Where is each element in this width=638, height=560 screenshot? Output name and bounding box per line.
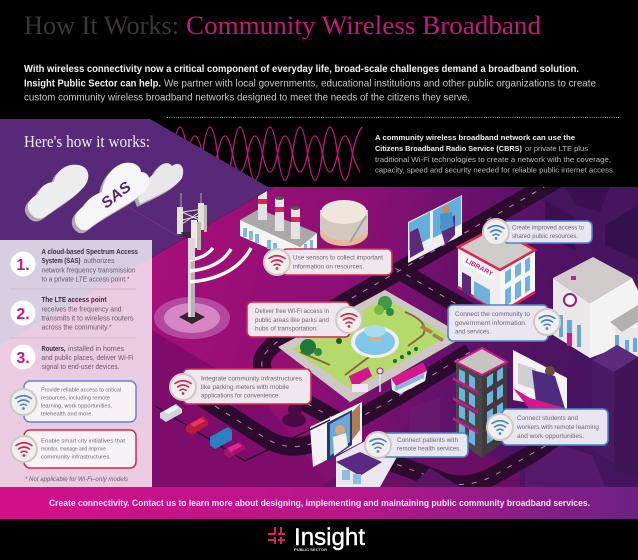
panel: steps bbox=[0, 240, 152, 487]
callout: free wi-fi: Deliver free Wi-Fi access in bbox=[255, 308, 329, 315]
step 2 bbox=[10, 295, 134, 332]
callout: sensors: Use sensors to collect important bbox=[293, 254, 383, 262]
bus shelter bbox=[349, 367, 383, 392]
step 3: and public places, deliver Wi-Fi bbox=[42, 353, 134, 362]
bus bbox=[391, 363, 427, 394]
library: LIBRARY bbox=[464, 258, 494, 278]
CBRS description: Citizens Broadband Radio Service (CBRS) bbox=[375, 144, 523, 153]
factory bbox=[240, 191, 317, 250]
step 2: The LTE access point bbox=[42, 295, 107, 304]
callout: reliable access: resources, including remote bbox=[41, 396, 110, 402]
antenna array bbox=[125, 193, 207, 260]
fountain bbox=[351, 325, 399, 358]
storage tank bbox=[320, 200, 368, 246]
step 1: 1. bbox=[16, 257, 30, 274]
ground bbox=[152, 187, 638, 487]
callout: free wi-fi: hubs of transportation. bbox=[255, 326, 318, 332]
intro text: With wireless connectivity now a critical component of everyday life, broad-scale challenges demand a broadband solution. bbox=[24, 64, 579, 75]
logo: PUBLIC SECTOR bbox=[294, 548, 327, 552]
step 3: signal to end-user devices. bbox=[42, 362, 120, 371]
intro text bbox=[24, 64, 596, 104]
callout: smart city: community infrastructures. bbox=[41, 454, 111, 460]
signal waves bbox=[190, 248, 251, 282]
step 1 bbox=[10, 247, 138, 284]
logo: Insight bbox=[294, 524, 365, 551]
parked cars and truck bbox=[155, 404, 330, 461]
step 1: A cloud-based Spectrum Access bbox=[42, 247, 138, 256]
title: How It Works: bbox=[24, 11, 179, 40]
logo icon bbox=[268, 527, 288, 547]
here's how it works heading: Here's how it works: bbox=[24, 132, 150, 151]
callout: sensors bbox=[264, 249, 392, 275]
callout: reliable access: learning, work opportunities, bbox=[41, 404, 112, 410]
callout: free wi-fi: public areas like parks and bbox=[255, 317, 329, 324]
intro text: Insight Public Sector can help. bbox=[24, 78, 161, 90]
cell tower bbox=[154, 247, 252, 339]
callout: reliable access bbox=[10, 381, 136, 422]
library bbox=[458, 228, 535, 313]
callout: parking: Integrate community infrastructures bbox=[201, 376, 303, 382]
road markings bbox=[214, 187, 546, 485]
step 1: authorizes bbox=[84, 256, 115, 265]
callout: students bbox=[487, 409, 608, 445]
step 2: transmits it to wireless routers bbox=[42, 314, 134, 322]
callout: government: Connect the community to bbox=[455, 311, 530, 318]
callout: free wi-fi bbox=[247, 302, 362, 337]
callout: reliable access: telehealth and more. bbox=[41, 412, 93, 418]
cloud SAS: SAS bbox=[98, 178, 134, 212]
government building bbox=[553, 257, 638, 360]
CBRS description: or private LTE plus bbox=[525, 144, 588, 153]
callout: public resources bbox=[483, 219, 592, 245]
intro text: custom community wireless broadband networks designed to meet the needs of the citizens they serve. bbox=[24, 92, 470, 104]
step 3 bbox=[10, 344, 134, 371]
call to action bar bbox=[0, 487, 638, 519]
step 3: 3. bbox=[16, 350, 30, 367]
callout: patients bbox=[365, 432, 468, 458]
park bbox=[278, 290, 465, 402]
cloud SAS bbox=[72, 163, 149, 233]
CBRS description bbox=[375, 133, 615, 174]
callout: students: and work opportunities. bbox=[517, 433, 584, 440]
callout: sensors: information on resources. bbox=[293, 264, 364, 270]
wave graphic bbox=[172, 127, 362, 180]
callout: government: and services. bbox=[455, 328, 491, 336]
city illustration bbox=[152, 172, 638, 487]
trees bbox=[300, 296, 394, 356]
clinic bbox=[336, 441, 396, 487]
clouds bbox=[25, 163, 183, 233]
dark purple tower bbox=[592, 345, 638, 372]
step 1: network frequency transmission bbox=[42, 266, 136, 274]
apartment tower bbox=[453, 348, 507, 458]
step 3: Routers, bbox=[42, 344, 66, 353]
callout: public resources: Create improved access to bbox=[512, 224, 584, 232]
callout: public resources: shared public resources. bbox=[512, 233, 578, 240]
callout: patients: Connect patients with bbox=[397, 437, 458, 444]
title: Community Wireless Broadband bbox=[186, 11, 541, 40]
callout: parking bbox=[170, 369, 311, 404]
purple header panel bbox=[0, 119, 274, 260]
benches and hedges bbox=[393, 325, 444, 363]
step 1: to a private LTE access point.* bbox=[42, 274, 130, 284]
callout: parking: like parking meters with mobile bbox=[201, 384, 289, 391]
dotted divider bbox=[167, 116, 620, 118]
purple houses bbox=[410, 420, 605, 487]
callout: patients: remote health services. bbox=[397, 446, 461, 452]
callout: students: Connect students and bbox=[517, 415, 578, 422]
callout: government: government information bbox=[455, 320, 525, 327]
telehealth phone panel bbox=[310, 402, 362, 467]
step 2: across the community.* bbox=[42, 322, 112, 332]
CBRS description: capacity, speed and security needed for reliable public internet access. bbox=[375, 166, 615, 174]
street tree bbox=[282, 403, 306, 427]
callout: smart city: Enable smart city initiatives that bbox=[41, 438, 125, 444]
callout: students: workers with remote learning bbox=[516, 424, 599, 431]
CBRS description: traditional Wi-Fi technologies to create a network with the coverage, bbox=[375, 155, 611, 164]
remote learning panel bbox=[513, 350, 567, 412]
roads bbox=[196, 187, 564, 487]
CBRS description: A community wireless broadband network can use the bbox=[375, 133, 575, 142]
purple buildings top right bbox=[542, 187, 638, 260]
step 1: System (SAS) bbox=[42, 256, 81, 265]
callout: reliable access: Provide reliable access to critical bbox=[41, 388, 121, 394]
callout: smart city bbox=[11, 430, 136, 468]
cloud left bbox=[25, 165, 88, 221]
step 2: receives the frequency and bbox=[42, 304, 122, 314]
cloud right bbox=[134, 163, 183, 207]
callout: parking: applications for convenience. bbox=[201, 392, 280, 400]
step 2: 2. bbox=[16, 306, 30, 323]
callout: government bbox=[448, 305, 560, 341]
video call panel: student bbox=[408, 195, 462, 263]
call to action bar: Create connectivity. Contact us to learn more about designing, implementing and maintaining public community broadband services. bbox=[49, 498, 590, 509]
title bbox=[24, 11, 541, 40]
step 3: installed in homes bbox=[68, 344, 124, 353]
intro text: We partner with local governments, educational institutions and other public organizations to create bbox=[164, 78, 596, 90]
callout: smart city: monitor, manage and improve bbox=[41, 446, 106, 452]
footnote: * Not applicable for Wi-Fi–only models bbox=[25, 477, 128, 483]
